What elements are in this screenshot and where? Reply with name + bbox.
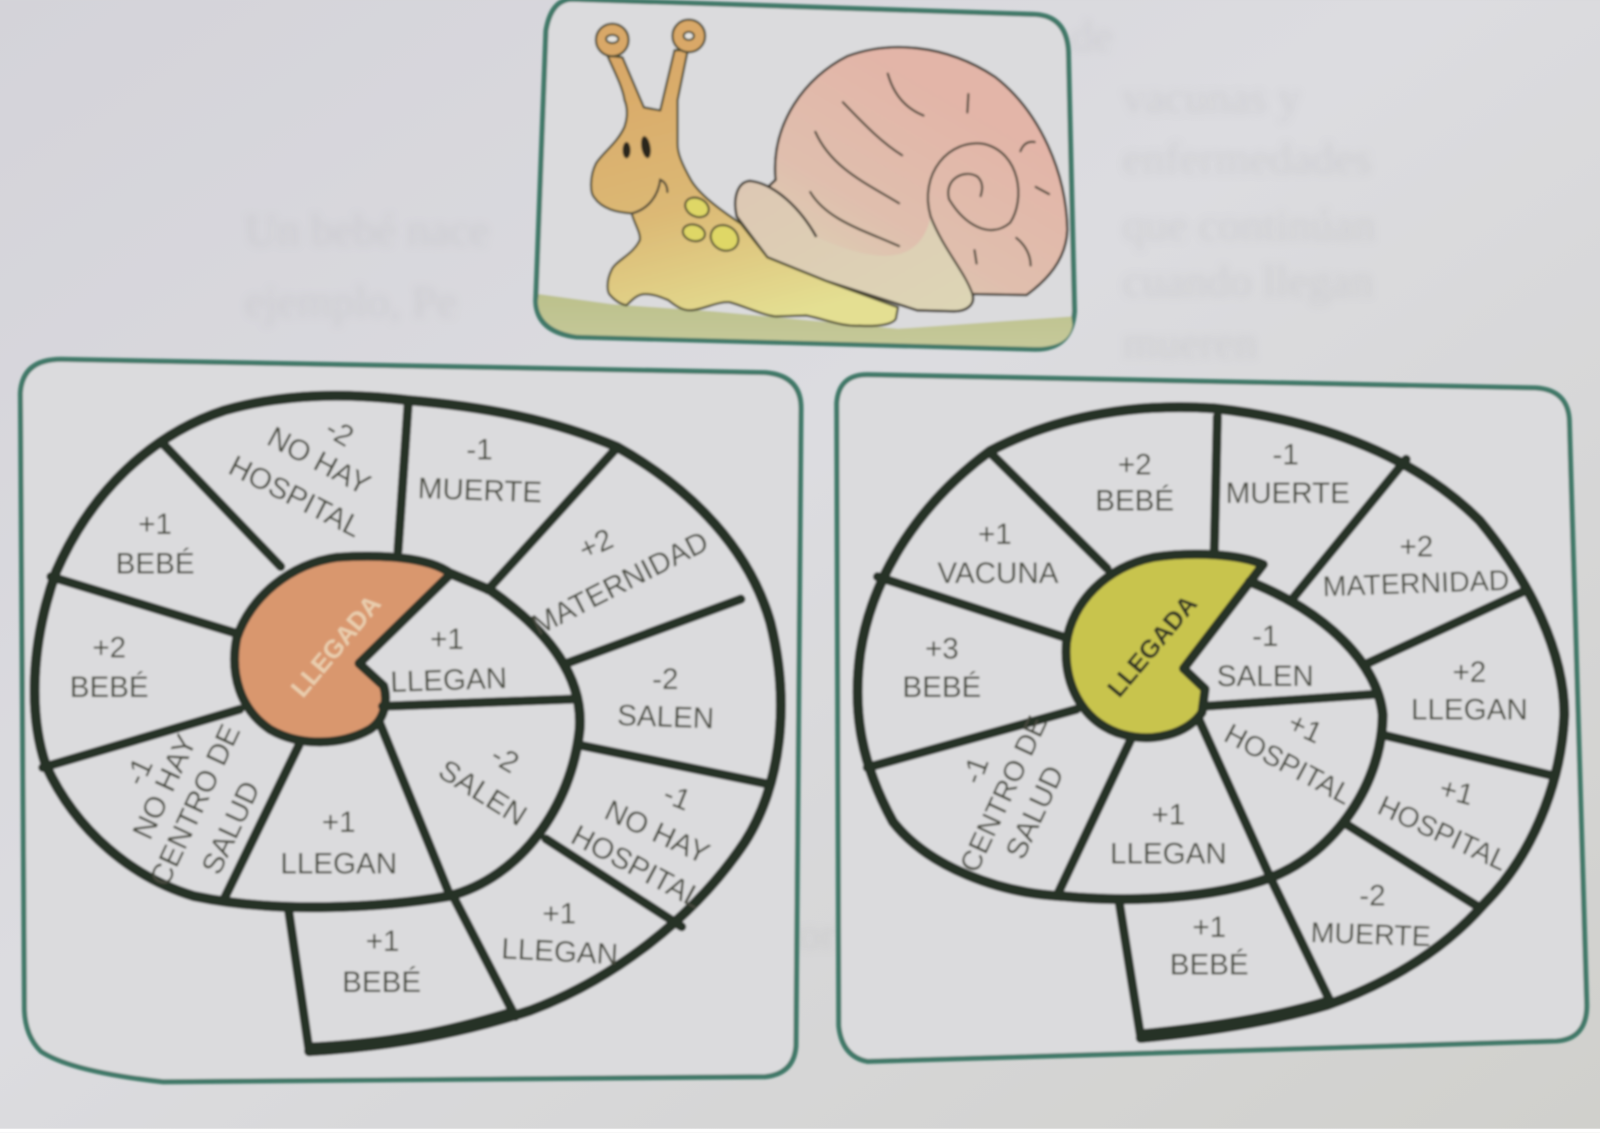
cell: -2 salen: SALEN bbox=[617, 699, 715, 735]
text: poblacion y salud en la comunidad bbox=[61, 848, 686, 898]
text: de otros sectores que son parte de un territorio bbox=[41, 909, 871, 959]
center: LLEGADA green: LLEGADA bbox=[1102, 590, 1203, 703]
text: que continúan bbox=[1122, 200, 1375, 250]
cell: +2 bebe bbox=[1095, 449, 1174, 517]
cell: +1 vacuna bbox=[937, 518, 1059, 590]
cell: +1 llegan bottom: +1 bbox=[322, 806, 356, 839]
cell: +1 hospital outer: +1 bbox=[1436, 772, 1477, 812]
cell: +2 llegan: +2 bbox=[1453, 656, 1486, 689]
cell: +3 bebe: BEBÉ bbox=[902, 671, 981, 704]
spokes bbox=[867, 416, 1553, 1000]
cell: +1 hospital outer: HOSPITAL bbox=[1373, 790, 1512, 878]
cell: +1 llegan bbox=[1110, 799, 1227, 870]
icon: snail body bbox=[591, 20, 898, 326]
cell: -2 muerte: -2 bbox=[1359, 879, 1386, 912]
cell: -2 no hay hospital: NO HAY bbox=[262, 420, 376, 502]
cell: -2 salen inner: -2 bbox=[485, 738, 524, 780]
cell: +1 llegan inner: +1 bbox=[430, 623, 464, 656]
cell: +2 bebe: +2 bbox=[1118, 449, 1152, 482]
spiral outline bbox=[858, 407, 1564, 1038]
cell: -2 muerte: MUERTE bbox=[1310, 917, 1431, 953]
cell: +2 maternidad: +2 bbox=[574, 523, 618, 567]
cell: -1 salen bbox=[1217, 620, 1314, 693]
center: LLEGADA orange bbox=[235, 556, 451, 742]
cell: +1 bebe tail bbox=[1170, 911, 1249, 982]
cell: +1 llegan inner: LLEGAN bbox=[390, 662, 508, 699]
cell: +2 maternidad bbox=[1322, 530, 1510, 603]
cell: -1 muerte: MUERTE bbox=[417, 472, 543, 509]
frame of left panel bbox=[20, 359, 801, 1082]
cell: -1 centro de salud: SALUD bbox=[999, 761, 1071, 864]
cell: -2 no hay hospital: -2 bbox=[320, 412, 359, 454]
spiral outline bbox=[35, 396, 781, 1051]
cell: +2 bebe: +2 bbox=[92, 631, 126, 664]
thick tail of spiral bbox=[1141, 1003, 1327, 1036]
cell: +3 bebe: +3 bbox=[925, 632, 959, 665]
cell: -1 muerte: MUERTE bbox=[1226, 477, 1350, 510]
cell: +1 vacuna: +1 bbox=[978, 518, 1012, 551]
cell: +1 llegan: +1 bbox=[1152, 799, 1185, 832]
cell: +2 maternidad: MATERNIDAD bbox=[527, 525, 714, 642]
panel: right spiral game bbox=[837, 375, 1587, 1061]
cell: +1 bebe tail: +1 bbox=[1192, 911, 1226, 944]
center: LLEGADA green bbox=[1066, 554, 1263, 738]
cell: +2 maternidad: +2 bbox=[1399, 530, 1433, 563]
cell: +1 bebe: BEBÉ bbox=[116, 548, 195, 581]
text: vacunas y bbox=[1122, 72, 1301, 122]
cell: -1 muerte: -1 bbox=[1273, 438, 1299, 471]
cell: -1 centro de salud: CENTRO DE bbox=[954, 711, 1054, 877]
frame of right panel bbox=[837, 375, 1587, 1061]
text: enfermedades bbox=[1122, 134, 1372, 184]
cell: -1 salen: SALEN bbox=[1217, 660, 1314, 693]
cell: +1 bebe tail: BEBÉ bbox=[1170, 949, 1249, 982]
cell: -1 muerte bbox=[417, 433, 543, 509]
icon: snail shell bbox=[735, 47, 1067, 311]
text: otro sin hospital y sin centro de salud bbox=[41, 970, 710, 1020]
cell: -1 no hay centro de salud bbox=[119, 719, 267, 891]
panel: snail illustration bbox=[536, 0, 1074, 349]
text: Hablamos de bbox=[878, 11, 1113, 61]
cell: +1 llegan outer: LLEGAN bbox=[501, 932, 619, 971]
spokes bbox=[43, 403, 767, 1016]
cell: +1 bebe tail: BEBÉ bbox=[342, 966, 421, 999]
panel: left spiral game bbox=[20, 359, 801, 1082]
cell: +1 llegan inner bbox=[390, 623, 508, 699]
center: LLEGADA orange: LLEGADA bbox=[286, 590, 387, 703]
cell: +1 bebe: +1 bbox=[138, 508, 172, 541]
text: ejemplo, Pe bbox=[245, 277, 457, 327]
cell: +1 llegan outer bbox=[501, 898, 619, 971]
cell: +3 bebe bbox=[902, 632, 981, 704]
text: Un bebé nace bbox=[245, 205, 489, 255]
cell: -1 no hay hospital bbox=[566, 777, 715, 916]
cell: -1 no hay centro de salud: NO HAY bbox=[126, 729, 203, 844]
cell: -1 no hay hospital: HOSPITAL bbox=[566, 819, 708, 916]
tail closing line bbox=[1119, 903, 1141, 1038]
cell: +1 vacuna: VACUNA bbox=[937, 557, 1059, 590]
cell: -1 no hay hospital: -1 bbox=[659, 777, 695, 818]
cell: +2 bebe: BEBÉ bbox=[1095, 484, 1174, 517]
cell: -1 centro de salud: -1 bbox=[956, 752, 996, 788]
cell: +1 llegan outer: +1 bbox=[542, 898, 576, 931]
thick tail of spiral bbox=[309, 1014, 510, 1049]
ground bbox=[538, 294, 1072, 347]
cell: -2 salen bbox=[617, 663, 715, 735]
cell: +1 bebe tail: +1 bbox=[366, 925, 400, 958]
cell: -2 salen inner: SALEN bbox=[433, 753, 532, 833]
cell: +2 llegan: LLEGAN bbox=[1411, 694, 1528, 727]
cell: +1 llegan bottom bbox=[280, 806, 397, 881]
tail closing line bbox=[289, 911, 309, 1051]
frame of snail panel bbox=[536, 0, 1074, 349]
cell: +2 bebe bbox=[70, 631, 149, 704]
cell: +1 bebe tail bbox=[342, 925, 421, 999]
cell: +2 maternidad: MATERNIDAD bbox=[1322, 565, 1510, 603]
cell: -2 no hay hospital bbox=[223, 412, 376, 544]
cell: -2 muerte bbox=[1310, 879, 1431, 953]
cell: -1 no hay hospital: NO HAY bbox=[600, 794, 715, 871]
cell: +1 hospital inner: HOSPITAL bbox=[1219, 718, 1357, 811]
cell: -2 salen: -2 bbox=[652, 663, 678, 696]
cell: -1 muerte: -1 bbox=[466, 433, 493, 466]
text: cuando llegan bbox=[1122, 256, 1373, 306]
cell: -1 no hay centro de salud: -1 bbox=[119, 753, 160, 791]
cell: +1 llegan bottom: LLEGAN bbox=[280, 848, 397, 881]
cell: +1 hospital inner: +1 bbox=[1283, 706, 1327, 750]
text: mueren bbox=[1122, 317, 1257, 367]
cell: -1 salen: -1 bbox=[1252, 620, 1278, 653]
cell: -1 muerte bbox=[1226, 438, 1350, 510]
cell: +2 llegan bbox=[1411, 656, 1528, 727]
cell: -1 no hay centro de salud: SALUD bbox=[195, 776, 267, 879]
cell: -1 no hay centro de salud: CENTRO DE bbox=[144, 719, 247, 891]
cell: +1 bebe bbox=[116, 508, 195, 581]
cell: +1 llegan: LLEGAN bbox=[1110, 837, 1227, 870]
cell: +2 bebe: BEBÉ bbox=[70, 671, 149, 704]
cell: -2 no hay hospital: HOSPITAL bbox=[223, 449, 367, 544]
